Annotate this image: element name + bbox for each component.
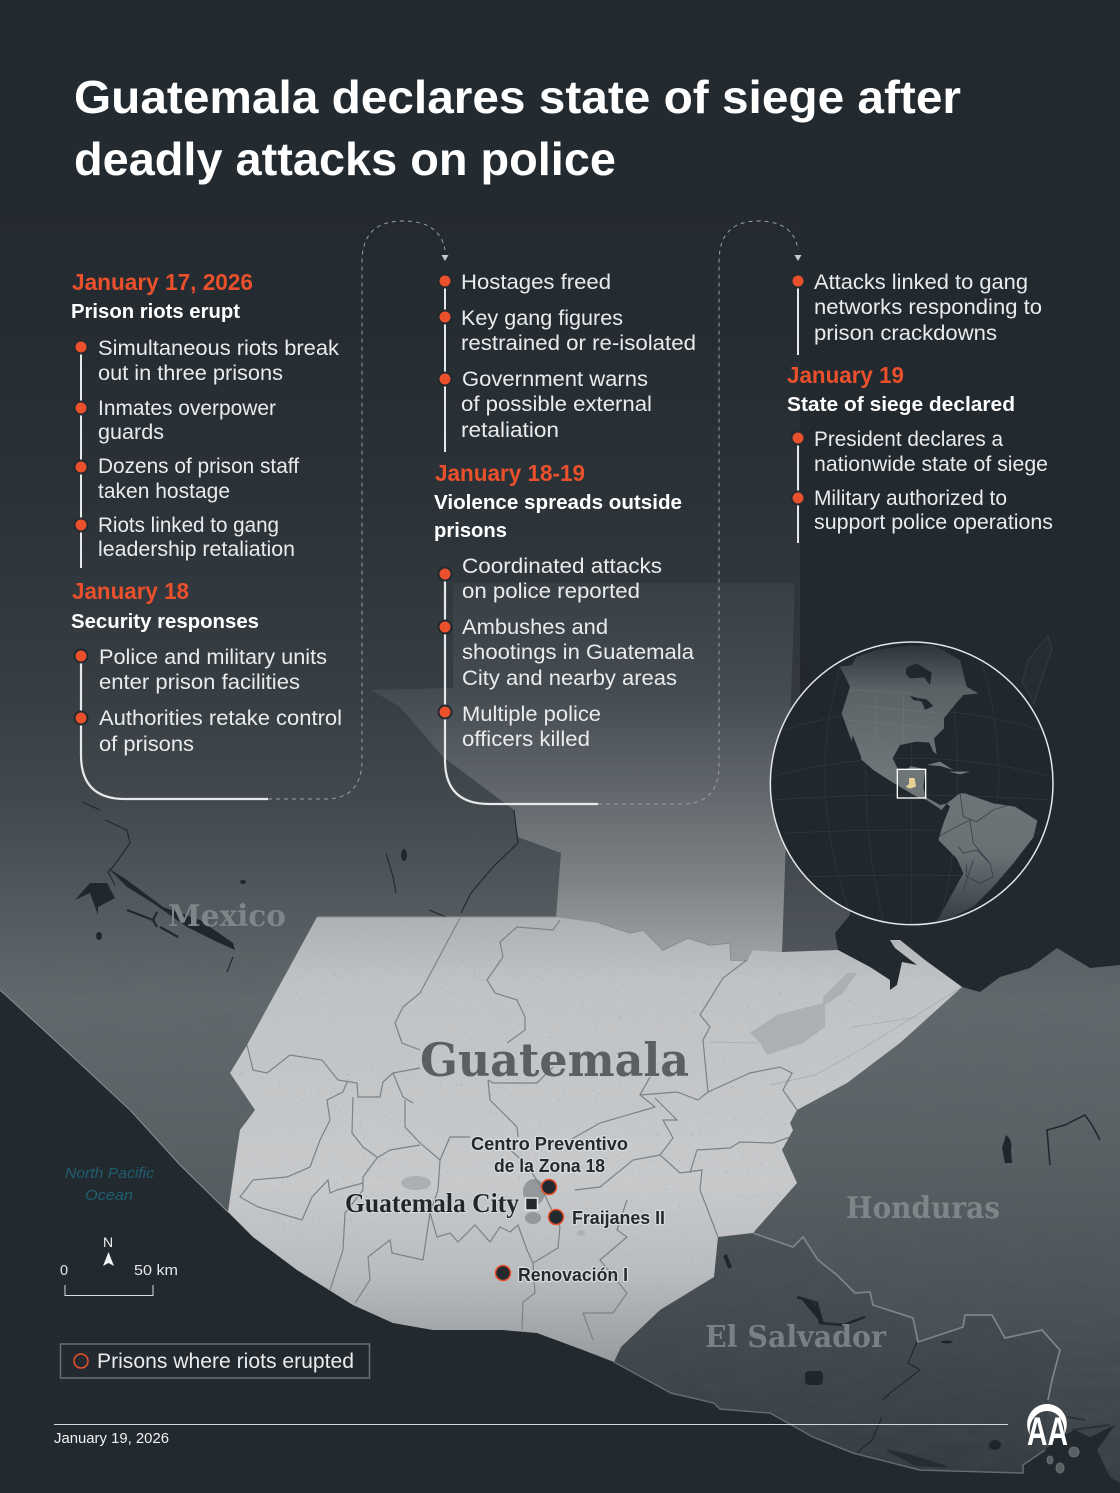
label: Guatemala: Guatemala	[420, 1033, 689, 1087]
bullet text: Dozens of prison staff	[98, 455, 299, 478]
footer date: January 19, 2026	[54, 1431, 169, 1447]
globe: South America	[937, 793, 1037, 922]
scale bar	[60, 1263, 178, 1296]
bullet text: City and nearby areas	[462, 667, 677, 690]
legend: Prisons where riots erupted	[97, 1350, 354, 1373]
panel: January 19	[787, 362, 1053, 543]
heading: security responses: Security responses	[71, 611, 259, 633]
bullet text: Hostages freed	[461, 271, 611, 294]
country labels	[168, 899, 1000, 1355]
globe: Hudson Bay	[906, 663, 932, 685]
bullet text: out in three prisons	[98, 362, 283, 385]
bullet text: Authorities retake control	[99, 707, 342, 730]
map background	[0, 473, 1120, 1483]
bullet line	[74, 340, 88, 568]
prison marker: Centro Preventivo: de la Zona 18	[494, 1156, 605, 1176]
bullet text: Riots linked to gang	[98, 514, 279, 537]
heading: state of siege declared: State of siege declared	[787, 394, 1015, 416]
bullet text: of possible external	[461, 393, 652, 416]
label: North Pacific Ocean: Ocean	[85, 1187, 133, 1204]
bullet text	[814, 271, 1042, 345]
map: rivers in eastern Guatemala	[710, 987, 962, 1085]
title	[74, 71, 961, 185]
date: January 19: January 19	[787, 362, 904, 388]
map: departmental borders	[240, 918, 797, 1340]
north arrow: N	[103, 1234, 113, 1250]
map: Yucatan highlight	[371, 583, 795, 960]
date: January 17: January 17, 2026	[72, 269, 253, 295]
heading: violence spreads outside prisons	[434, 492, 682, 542]
label: Honduras: Honduras	[846, 1191, 1000, 1226]
bullet text: of prisons	[99, 733, 194, 756]
bullet text: Military authorized to	[814, 487, 1007, 510]
heading: violence spreads outside prisons: Violence spreads outside	[434, 492, 682, 514]
prison marker: Renovación I: Renovación I	[518, 1265, 628, 1285]
title: deadly attacks on police	[74, 133, 616, 185]
bullet line	[792, 274, 804, 355]
icon: AA logo: AA	[1027, 1410, 1068, 1454]
legend	[60, 1344, 370, 1378]
locator globe	[770, 642, 1053, 925]
capital: Guatemala City: Guatemala City	[345, 1188, 519, 1218]
map: Gulf of Fonseca islands	[1047, 1447, 1079, 1473]
bullet text: Multiple police	[462, 703, 601, 726]
map: Mexican rivers and lakes	[75, 802, 518, 972]
globe: South American borders	[938, 793, 1008, 890]
scale bar: 50 km	[134, 1263, 178, 1279]
bullet text: guards	[98, 421, 164, 444]
label: Mexico: Mexico	[168, 899, 286, 934]
globe: graticule	[772, 643, 1052, 923]
bullet dots	[74, 650, 88, 724]
footer rule	[54, 1424, 1008, 1426]
bullet text: nationwide state of siege	[814, 453, 1048, 476]
panel: January 18-19 continued	[792, 271, 1042, 355]
bullet dots	[438, 568, 452, 718]
bullet text: Coordinated attacks	[462, 555, 662, 578]
globe: locator square with Guatemala highlight	[897, 769, 926, 798]
bullet text	[99, 646, 342, 756]
bullet text: Simultaneous riots break	[98, 337, 340, 360]
prison marker: Fraijanes II: Fraijanes II	[572, 1208, 665, 1228]
title: Guatemala declares state of siege after	[74, 71, 961, 123]
date: January 18-19: January 18-19	[435, 460, 585, 486]
map: faint Florida shape behind globe	[1022, 636, 1052, 704]
timeline connector: first to second column	[81, 221, 448, 799]
label: North Pacific Ocean: North Pacific	[65, 1165, 155, 1182]
map: Caribbean sea	[800, 0, 1120, 992]
bullet text: taken hostage	[98, 480, 230, 503]
panel: January 18 continued	[438, 271, 696, 452]
bullet text: networks responding to	[814, 296, 1042, 319]
bullet text: Attacks linked to gang	[814, 271, 1028, 294]
bullet line	[438, 274, 452, 452]
date: January 18: January 18	[72, 578, 189, 604]
map: Honduras–El Salvador border	[753, 1233, 1060, 1400]
map: El Salvador	[614, 1233, 1060, 1473]
panel: January 17	[71, 269, 340, 568]
bullet text: shootings in Guatemala	[462, 641, 694, 664]
map: Belize shade	[782, 583, 850, 952]
scale bar: 0	[60, 1263, 68, 1279]
bullet text: Inmates overpower	[98, 397, 276, 420]
globe: North America	[840, 645, 978, 810]
bullet text: restrained or re-isolated	[461, 332, 696, 355]
bullet text: retaliation	[461, 419, 559, 442]
bullet text	[814, 428, 1053, 534]
map: Pacific ocean	[0, 990, 1120, 1493]
bullet text: Police and military units	[99, 646, 327, 669]
heading: prison riots erupt: Prison riots erupt	[71, 301, 240, 323]
map: Atitlan and other lakes	[401, 1176, 585, 1236]
globe: Great Lakes	[910, 696, 933, 710]
map: lakes and rivers in Honduras and El Salvador	[725, 1115, 1110, 1467]
prison marker: Centro Preventivo	[471, 1134, 628, 1194]
bullet text: Key gang figures	[461, 307, 623, 330]
bullet text	[98, 337, 340, 561]
bullet text: President declares a	[814, 428, 1003, 451]
bullet text	[461, 271, 696, 442]
bullet text: Ambushes and	[462, 616, 608, 639]
map: Guatemala	[220, 910, 980, 1370]
map: Guatemala City urban area	[523, 1179, 545, 1224]
globe: US state borders	[848, 690, 940, 743]
north arrow	[103, 1234, 114, 1266]
label: North Pacific Ocean	[65, 1165, 155, 1204]
bullet text: Government warns	[462, 368, 648, 391]
panel: January 18-19	[434, 460, 694, 751]
heading: violence spreads outside prisons: prisons	[434, 520, 507, 542]
timeline connector: second to third column	[445, 221, 802, 804]
panel: January 18	[71, 578, 342, 756]
bullet text: on police reported	[462, 580, 640, 603]
bullet text	[462, 555, 694, 751]
bullet text: enter prison facilities	[99, 671, 300, 694]
bullet text: leadership retaliation	[98, 538, 295, 561]
bullet text: prison crackdowns	[814, 322, 997, 345]
bullet text: support police operations	[814, 511, 1053, 534]
icon: AA logo	[1027, 1404, 1068, 1454]
bullet text: officers killed	[462, 728, 590, 751]
globe: Gulf of California	[852, 735, 862, 758]
globe: Caribbean islands	[927, 762, 970, 774]
map: Lake Izabal	[750, 973, 857, 1055]
prison marker: Centro Preventivo: Centro Preventivo	[471, 1134, 628, 1154]
label: El Salvador: El Salvador	[705, 1320, 887, 1355]
bullet line	[792, 432, 804, 543]
